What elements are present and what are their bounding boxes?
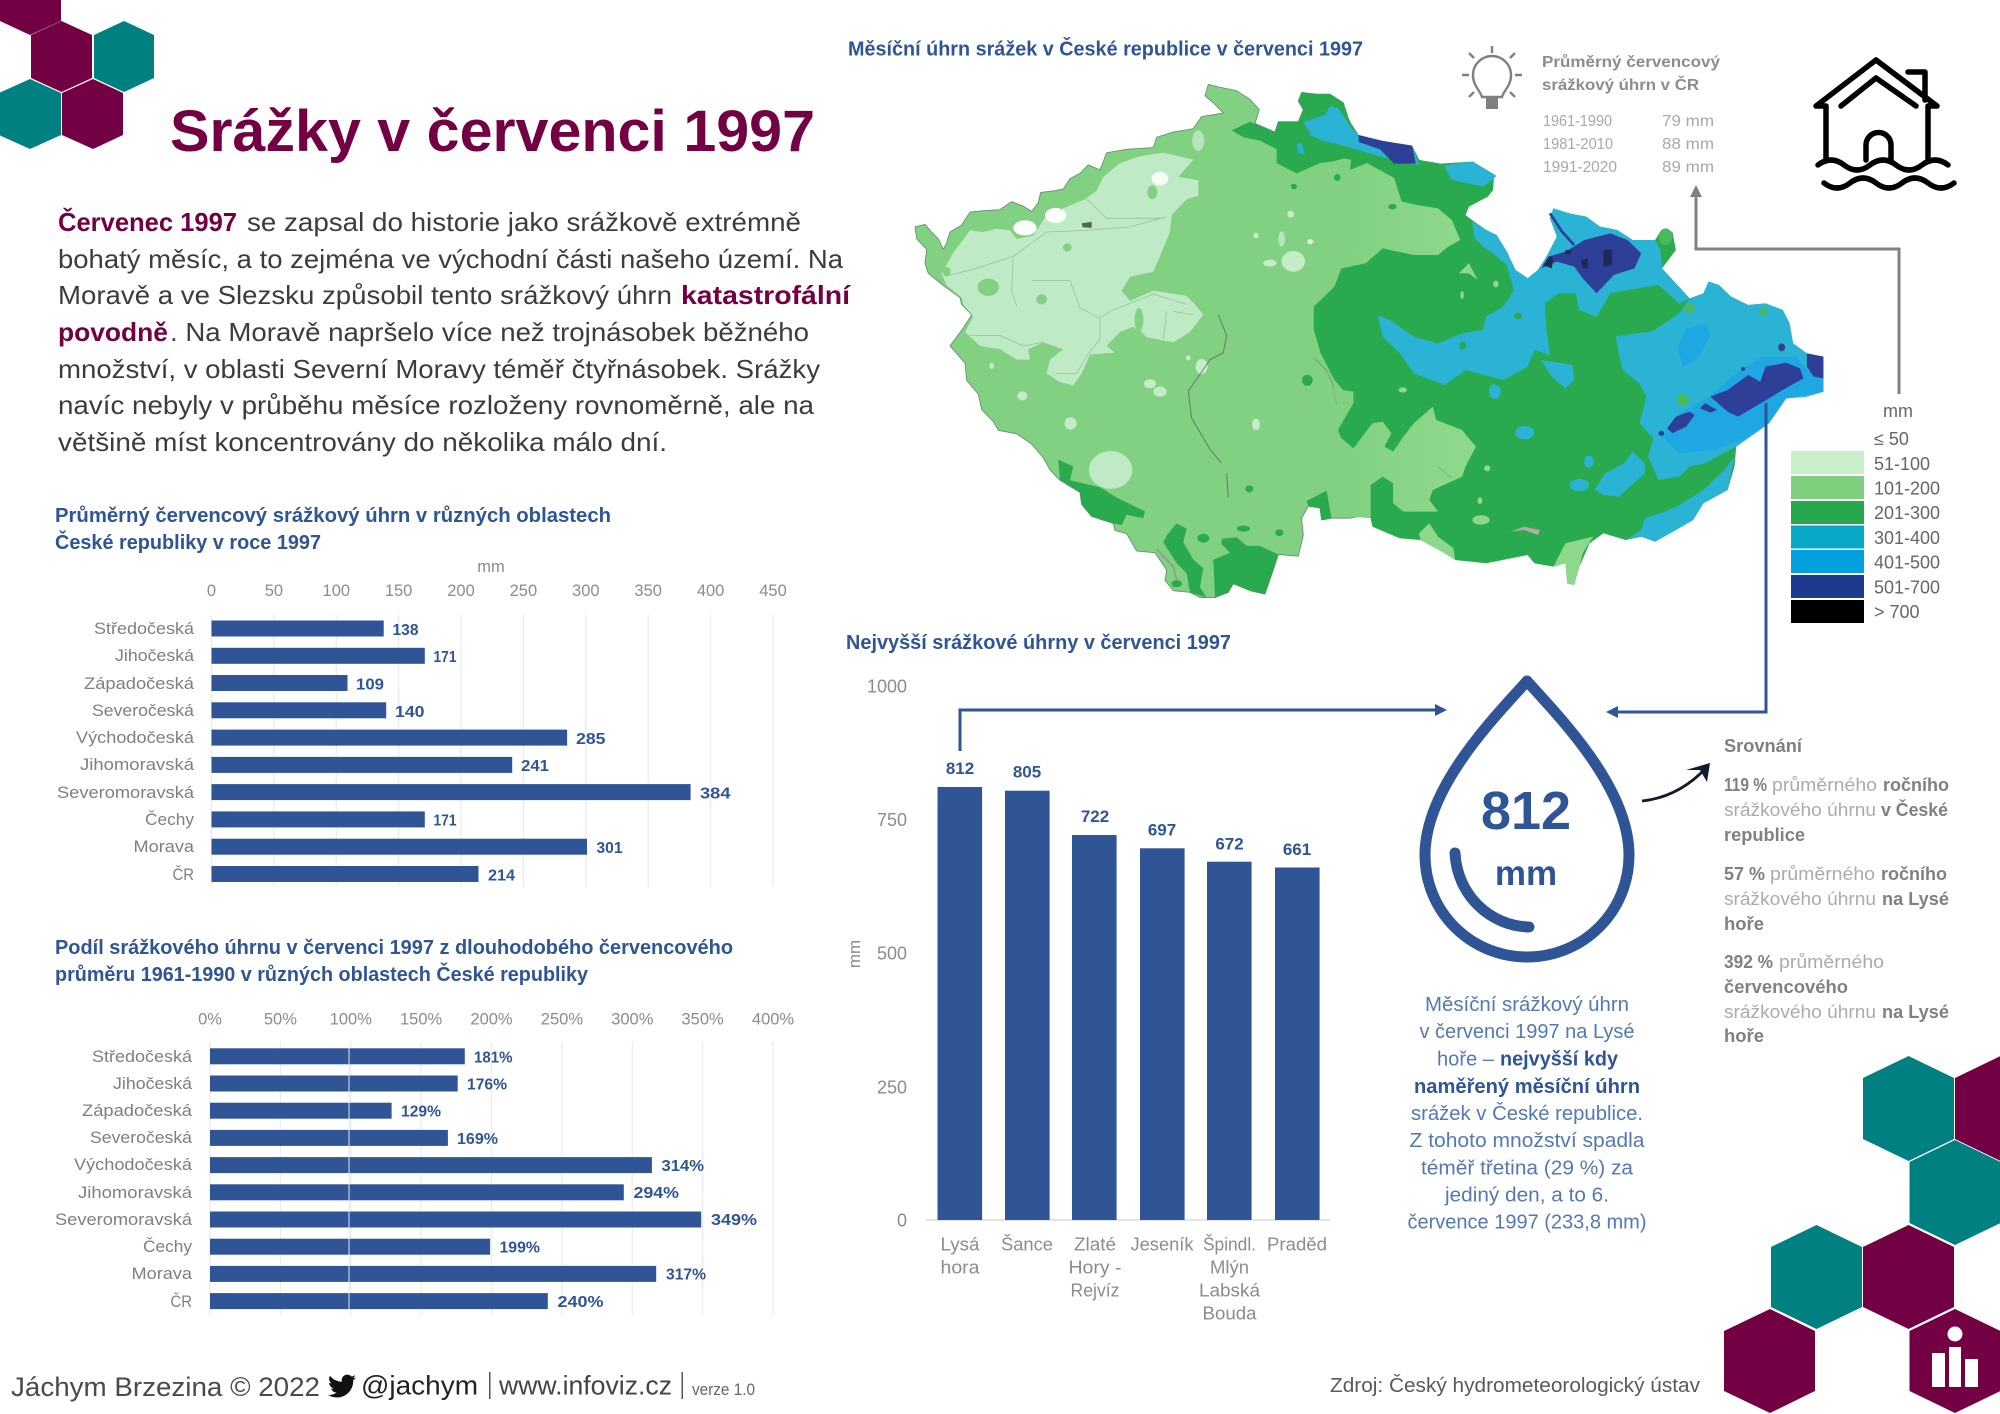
icon: twitter bird [328,1375,356,1397]
axis: station names: Šance [1001,1234,1053,1254]
drop caption: Měsíční srážkový úhrn [1425,994,1629,1016]
comparison text: republice [1724,824,1805,845]
intro text block [58,207,851,457]
title: Srážky v červenci 1997 [170,99,815,164]
intro text block: navíc nebyly v průběhu měsíce rozloženy rovnoměrně, ale na [58,390,815,420]
comparison text: 57 % [1724,863,1765,884]
arrow: map to drop [1606,403,1766,718]
bar chart: mm by region: Morava [134,837,195,856]
bar chart: stations: 672 [1215,834,1244,854]
arrow: curved to comparison [1642,763,1710,801]
legend: mm classes: > 700 [1874,602,1920,622]
axis: mm scale: 450 [759,582,787,600]
axis: y scale [845,676,1330,1230]
axis: percent scale [198,1010,794,1315]
axis: percent scale: 50% [264,1010,297,1028]
bar chart: stations: 805 [1013,762,1041,782]
axis: mm scale: 150 [385,582,412,600]
comparison text: v České [1881,799,1948,820]
axis: y scale: 250 [877,1078,907,1098]
bar chart: percent by region: 176% [467,1076,507,1094]
bar chart: mm by region: 171 [434,812,457,830]
comparison text: hoře [1724,1025,1764,1046]
axis: mm scale: 250 [510,582,537,600]
bar chart: mm by region [57,619,731,884]
drop caption: naměřený měsíční úhrn [1414,1076,1640,1098]
panel: average July precipitation by region [55,505,787,887]
heading: chart 2 [55,937,733,986]
axis: y scale: mm [845,940,864,968]
bar chart: percent by region: 169% [457,1131,498,1148]
long-term averages note: 1991-2020 [1543,159,1617,176]
intro text block: většině míst koncentrovány do několika málo dní. [58,427,667,457]
legend: mm classes: 201-300 [1874,503,1940,523]
map east zones [1302,97,1823,585]
icon: water drop 812 mm: mm [1495,854,1557,893]
comparison text: hoře [1724,913,1764,934]
bar chart: percent by region: Východočeská [74,1155,193,1174]
legend: mm classes [1791,401,1940,623]
bar chart: mm by region: 171 [434,649,457,666]
axis: mm scale: 400 [697,582,724,600]
axis: station names: Hory - [1068,1258,1122,1278]
axis: percent scale: 150% [400,1010,443,1028]
drop caption: července 1997 (233,8 mm) [1408,1212,1646,1234]
rivers and border lines [950,199,1337,404]
drop caption: téměř třetina (29 %) za [1421,1158,1634,1180]
axis: percent scale: 0% [198,1010,222,1028]
intro text block: Moravě a ve Slezsku způsobil tento srážkový úhrn [58,280,672,310]
heading: chart 2: průměru 1961-1990 v různých oblastech České republiky [55,962,589,986]
intro text block: povodně [58,317,168,347]
map: Czech Republic precipitation [915,84,1823,598]
long-term averages note: 89 mm [1662,159,1714,176]
bar chart: percent by region: 314% [662,1158,704,1175]
legend: mm classes: ≤ 50 [1874,429,1909,449]
axis: mm scale: mm [477,558,505,576]
comparison text: srážkového úhrnu [1724,799,1876,820]
bar chart: stations: 697 [1148,820,1176,840]
comparison text: srážkového úhrnu [1724,1001,1876,1022]
bar chart: mm by region: Středočeská [94,619,195,638]
axis: y scale: 500 [877,944,907,964]
axis: station names: Lysá [940,1234,981,1254]
comparison text: 392 % [1724,951,1773,972]
bar chart: mm by region: 285 [576,731,606,748]
map east base [1352,123,1823,585]
legend: mm classes: mm [1883,401,1913,421]
bar chart: percent by region: Jihočeská [113,1074,193,1093]
drop caption: nejvyšší kdy [1500,1048,1619,1070]
footer: author and links: Jáchym Brzezina © 2022 [11,1372,320,1402]
bar chart: percent by region: Severomoravská [55,1210,193,1229]
bar chart: percent by region: 181% [474,1050,513,1066]
axis: station names: Praděd [1267,1234,1327,1254]
heading: chart 1: České republiky v roce 1997 [55,530,321,554]
axis: mm scale: 350 [634,582,662,600]
comparison text: srážkového úhrnu [1724,888,1876,909]
bar chart: mm by region: Severomoravská [57,783,195,802]
bar chart: mm by region: ČR [172,865,194,884]
axis: station names: Jeseník [1130,1234,1195,1254]
axis: percent scale: 200% [470,1010,513,1028]
bar chart: percent by region: 199% [500,1240,540,1256]
bar chart: stations [938,759,1320,1220]
legend: mm classes: 401-500 [1874,552,1940,572]
footer: author and links [11,1370,755,1402]
axis: percent scale: 100% [330,1010,372,1028]
map title: Měsíční úhrn srážek v České republice v červenci 1997 [848,36,1363,60]
heading: chart 2: Podíl srážkového úhrnu v červenci 1997 z dlouhodobého červencového [55,937,733,959]
axis: station names [940,1234,1327,1324]
comparison text: ročního [1883,774,1949,795]
intro text block: množství, v oblasti Severní Moravy téměř čtyřnásobek. Srážky [58,354,820,384]
axis: mm scale: 0 [207,582,216,600]
long-term averages note: srážkový úhrn v ČR [1542,76,1699,94]
map west base [915,84,1367,598]
bar chart: mm by region: 241 [521,758,549,775]
bar chart: mm by region: 138 [392,622,419,639]
footer: author and links: verze 1.0 [692,1381,755,1399]
map west zones [942,92,1367,598]
heading: chart 1 [55,505,611,554]
intro text block: bohatý měsíc, a to zejména ve východní části našeho území. Na [58,244,844,274]
bar chart: mm by region: 301 [596,840,623,857]
drop caption [1408,994,1646,1234]
footer: author and links: @jachym [361,1370,478,1400]
axis: percent scale: 350% [681,1010,724,1028]
comparison text [1724,735,1949,1046]
axis: station names: Rejvíz [1070,1280,1120,1300]
axis: station names: Špindl. [1203,1234,1256,1254]
comparison text: průměrného [1779,951,1884,972]
intro text block: . Na Moravě napršelo více než trojnásobek běžného [170,317,809,347]
bar chart: percent by region: 317% [666,1266,706,1284]
axis: mm scale: 50 [265,582,283,600]
intro text block: katastrofální [681,280,851,310]
axis: station names: Mlýn [1210,1258,1249,1278]
axis: y scale: 750 [877,810,907,830]
drop caption: v červenci 1997 na Lysé [1420,1021,1634,1043]
comparison text: ročního [1881,863,1947,884]
axis: y scale: 1000 [867,676,907,696]
bar chart: stations: 812 [946,759,974,778]
decorative hexagons top left [0,0,154,149]
bar chart: percent by region: Západočeská [82,1101,193,1120]
long-term averages note: 88 mm [1662,136,1714,153]
legend: mm classes: 501-700 [1874,578,1940,598]
bar chart: percent by region: ČR [170,1292,192,1311]
bar chart: percent by region: Středočeská [92,1047,193,1066]
axis: mm scale: 100 [323,582,350,600]
arrow: Lysá hora bar to drop [960,704,1447,751]
comparison text: červencového [1724,976,1848,997]
icon: water drop 812 mm [1425,681,1629,957]
bar chart: percent by region [55,1047,757,1311]
bar chart: mm by region: Východočeská [76,728,195,747]
axis: y scale: 0 [897,1210,907,1230]
legend: mm classes: 51-100 [1874,454,1930,474]
long-term averages note [1542,54,1720,176]
source: Zdroj: Český hydrometeorologický ústav [1330,1374,1700,1397]
bar chart: mm by region: 140 [395,704,425,721]
bar chart: percent by region: 240% [558,1294,604,1311]
footer: author and links: www.infoviz.cz [498,1370,672,1400]
bar chart: mm by region: Jihočeská [115,646,195,665]
intro text block: se zapsal do historie jako srážkově extrémně [247,207,801,237]
drop caption: jediný den, a to 6. [1444,1184,1609,1206]
axis: station names: Bouda [1202,1304,1258,1324]
bar chart: percent by region: 349% [711,1212,757,1229]
bar chart: stations: 722 [1081,807,1109,826]
long-term averages note: 79 mm [1662,113,1714,130]
comparison text: průměrného [1772,774,1877,795]
icon: bar chart logo [1932,1326,1978,1387]
axis: percent scale: 250% [541,1010,583,1028]
bar chart: percent by region: 129% [401,1104,441,1120]
panel: share of long-term July average [55,937,794,1315]
bar chart: mm by region: Čechy [145,810,195,829]
legend: mm classes: 101-200 [1874,478,1940,498]
axis: station names: Labská [1199,1280,1261,1300]
comparison text: na Lysé [1882,888,1949,909]
bar chart: mm by region: 109 [356,676,384,694]
icon: water drop 812 mm: 812 [1481,781,1571,841]
axis: mm scale: 300 [572,582,600,600]
bar chart: mm by region: Jihomoravská [80,755,195,774]
axis: mm scale: 200 [447,582,475,600]
decorative hexagons bottom right [1724,1056,2000,1413]
axis: mm scale [207,558,787,887]
long-term averages note: Průměrný červencový [1542,54,1720,71]
axis: station names: hora [940,1258,981,1278]
drop caption: hoře – [1437,1048,1495,1070]
axis: percent scale: 300% [611,1010,654,1028]
intro text block: Červenec 1997 [58,207,237,237]
bar chart: percent by region: Čechy [143,1237,193,1256]
icon: light bulb [1462,46,1522,109]
bar chart: mm by region: Západočeská [84,674,195,693]
comparison text: Srovnání [1724,735,1803,756]
icon: flooded house [1816,60,1954,188]
comparison text: 119 % [1724,774,1767,795]
long-term averages note: 1961-1990 [1543,113,1612,130]
drop caption: Z tohoto množství spadla [1410,1130,1645,1152]
axis: percent scale: 400% [752,1010,794,1028]
bar chart: mm by region: Severočeská [92,701,195,720]
bar chart: percent by region: Jihomoravská [78,1183,193,1202]
heading: chart 1: Průměrný červencový srážkový úhrn v různých oblastech [55,505,611,527]
comparison text: průměrného [1770,863,1875,884]
bar chart: mm by region: 214 [488,868,515,884]
panel: highest monthly totals [845,632,1330,1324]
arrow: grey from legend to averages note [1690,185,1899,394]
comparison text: na Lysé [1882,1001,1949,1022]
heading: chart 3: Nejvyšší srážkové úhrny v červenci 1997 [846,632,1231,654]
long-term averages note: 1981-2010 [1543,136,1613,153]
axis: station names: Zlaté [1074,1234,1116,1254]
bar chart: percent by region: Morava [132,1264,193,1283]
bar chart: mm by region: 384 [700,786,731,802]
bar chart: stations: 661 [1283,840,1311,859]
legend: mm classes: 301-400 [1874,528,1940,548]
bar chart: percent by region: 294% [634,1185,679,1202]
drop caption: srážek v České republice. [1411,1102,1643,1125]
bar chart: percent by region: Severočeská [90,1128,193,1147]
